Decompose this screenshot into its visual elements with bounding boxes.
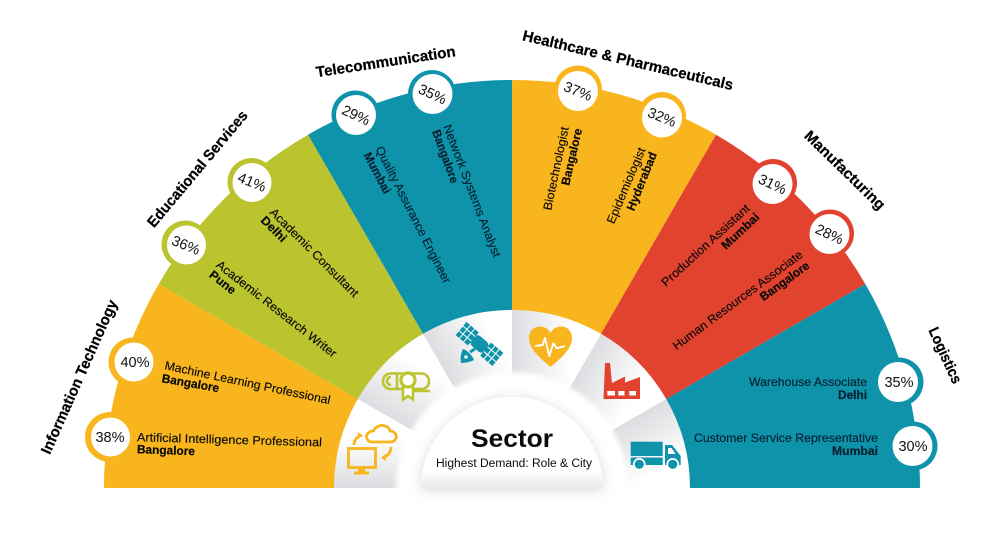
badge: 37% <box>554 66 602 114</box>
heading: Logistics: Logistics <box>925 325 965 386</box>
role: Human Resources Associate: Bangalore <box>757 258 812 304</box>
badge: 35% <box>408 70 456 118</box>
badge: 38% <box>85 412 135 462</box>
icon: diploma <box>383 373 430 400</box>
panel: Educational Services <box>144 107 430 400</box>
center dome: Sector <box>421 397 603 488</box>
badge: 35%: 35% <box>416 82 449 108</box>
badge: 35% <box>874 358 924 406</box>
badge: 29% <box>332 90 380 138</box>
badge: 30%: 30% <box>898 439 928 455</box>
icon: truck <box>631 442 681 471</box>
role: Human Resources Associate: Human Resources Associate <box>670 247 806 353</box>
badge: 32% <box>638 92 686 140</box>
role: Artificial Intelligence Professional <box>137 430 322 458</box>
icon: heart with pulse <box>529 326 572 367</box>
icon: satellite <box>455 322 504 366</box>
badge: 31% <box>749 159 797 207</box>
role: Warehouse Associate <box>749 375 867 402</box>
role: Academic Research Writer: Pune <box>207 268 239 297</box>
role: Production Assistant: Production Assistant <box>658 201 753 289</box>
panel: Manufacturing <box>601 127 888 399</box>
infographic: semicircular sector chart <box>40 30 960 495</box>
badge: 36%: 36% <box>169 233 202 259</box>
badge: 36% <box>162 220 210 268</box>
badge: 40%: 40% <box>120 355 150 371</box>
role: Biotechnologist <box>540 125 585 211</box>
role: Warehouse Associate: Warehouse Associate <box>749 375 867 389</box>
role: Customer Service Representative: Customer Service Representative <box>694 431 878 445</box>
role: Customer Service Representative: Mumbai <box>832 444 878 458</box>
badge: 38%: 38% <box>95 430 125 446</box>
badge: 35%: 35% <box>884 375 914 391</box>
role: Academic Research Writer: Academic Research Writer <box>214 258 340 360</box>
role: Academic Consultant: Academic Consultant <box>267 205 362 300</box>
badge: 37%: 37% <box>561 79 594 105</box>
role: Machine Learning Professional: Machine Learning Professional <box>164 358 332 407</box>
inner ring shading <box>334 310 684 488</box>
badge: 31%: 31% <box>756 172 789 198</box>
badge: 41%: 41% <box>235 170 268 196</box>
panel: Telecommunication <box>308 43 512 366</box>
role: Customer Service Representative <box>694 431 878 458</box>
panel: Logistics <box>631 284 965 488</box>
badge: 28% <box>806 210 854 258</box>
role: Network Systems Analyst: Network Systems Analyst <box>440 123 504 260</box>
dome subtitle: Highest Demand: Role & City <box>436 458 592 470</box>
heading: Telecommunication: Telecommunication <box>315 43 457 81</box>
role: Biotechnologist: Bangalore <box>558 127 585 187</box>
badge: 29%: 29% <box>339 103 372 129</box>
icon: factory <box>604 363 640 399</box>
role: Artificial Intelligence Professional: Bangalore <box>137 442 196 458</box>
badge: 28%: 28% <box>813 222 846 248</box>
badge: 30% <box>888 422 938 470</box>
heading: Educational Services: Educational Services <box>144 107 252 231</box>
badge: 32%: 32% <box>645 105 678 131</box>
role: Artificial Intelligence Professional: Artificial Intelligence Professional <box>137 430 322 449</box>
dome title: Sector <box>471 425 553 453</box>
icon: computer and cloud <box>348 425 396 474</box>
role: Machine Learning Professional: Bangalore <box>161 371 221 395</box>
badge: 41% <box>228 158 276 206</box>
role: Epidemiologist: Hyderabad <box>624 150 660 213</box>
heading: Manufacturing: Manufacturing <box>801 127 888 214</box>
role: Production Assistant: Mumbai <box>718 210 762 252</box>
panel: Information Technology <box>38 284 396 488</box>
heading: Healthcare & Pharmaceuticals: Healthcare & Pharmaceuticals <box>521 27 735 94</box>
panel: Healthcare & Pharmaceuticals <box>512 27 735 367</box>
role: Epidemiologist: Epidemiologist <box>604 145 649 226</box>
role: Biotechnologist: Biotechnologist <box>540 125 572 211</box>
role: Warehouse Associate: Delhi <box>838 388 867 402</box>
role: Quality Assurance Engineer: Mumbai <box>361 150 394 196</box>
role: Network Systems Analyst: Bangalore <box>429 128 462 185</box>
role: Quality Assurance Engineer: Quality Assurance Engineer <box>373 144 454 286</box>
badge: 40% <box>108 338 158 386</box>
role: Academic Consultant: Delhi <box>258 213 290 245</box>
heading: Information Technology: Information Technology <box>38 297 122 457</box>
